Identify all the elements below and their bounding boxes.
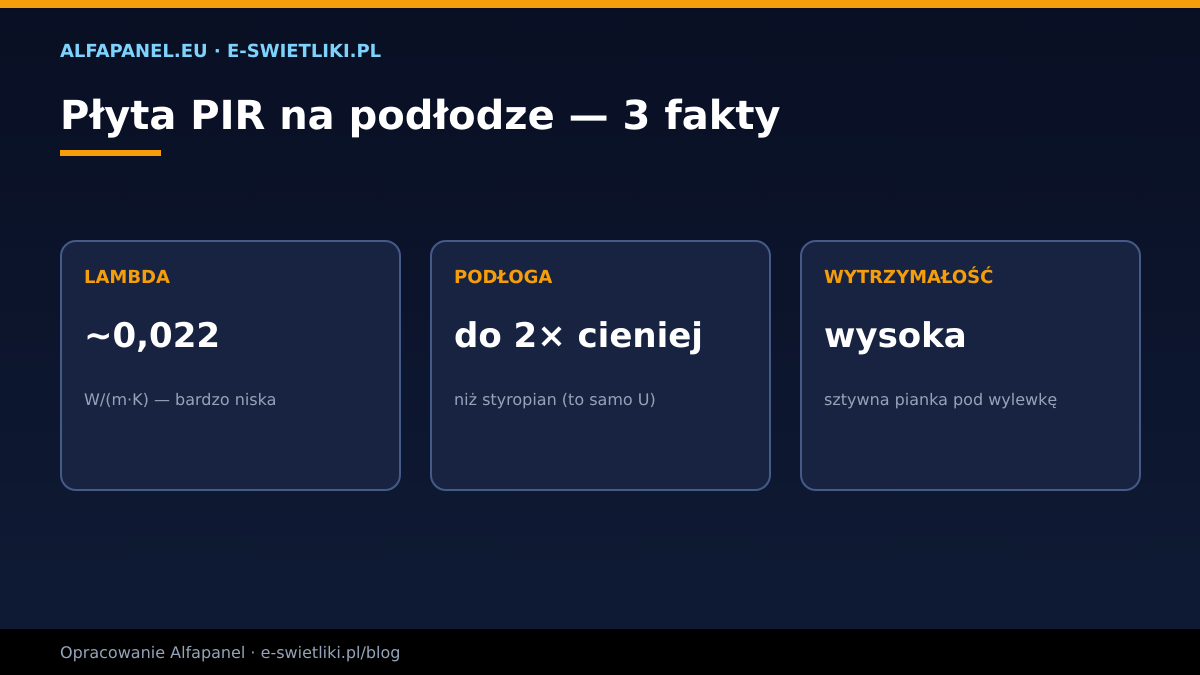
lambda label: LAMBDA xyxy=(84,267,170,288)
title: Płyta PIR na podłodze — 3 fakty xyxy=(60,93,781,139)
strength description: sztywna pianka pod wylewkę xyxy=(824,390,1057,409)
title underline xyxy=(60,150,161,156)
footer text: Opracowanie Alfapanel · e-swietliki.pl/blog xyxy=(60,643,400,662)
strength label: WYTRZYMAŁOŚĆ xyxy=(824,267,993,288)
floor value: do 2× cieniej xyxy=(454,316,703,356)
footer bar xyxy=(0,629,1200,675)
panel: floor xyxy=(430,240,771,491)
lambda description: W/(m·K) — bardzo niska xyxy=(84,390,276,409)
brand line: ALFAPANEL.EU · E-SWIETLIKI.PL xyxy=(60,41,381,62)
strength value: wysoka xyxy=(824,316,967,356)
panel: lambda xyxy=(60,240,401,491)
floor label: PODŁOGA xyxy=(454,267,552,288)
top accent bar xyxy=(0,0,1200,8)
lambda value: ~0,022 xyxy=(84,316,220,356)
panel: strength xyxy=(800,240,1141,491)
floor description: niż styropian (to samo U) xyxy=(454,390,656,409)
